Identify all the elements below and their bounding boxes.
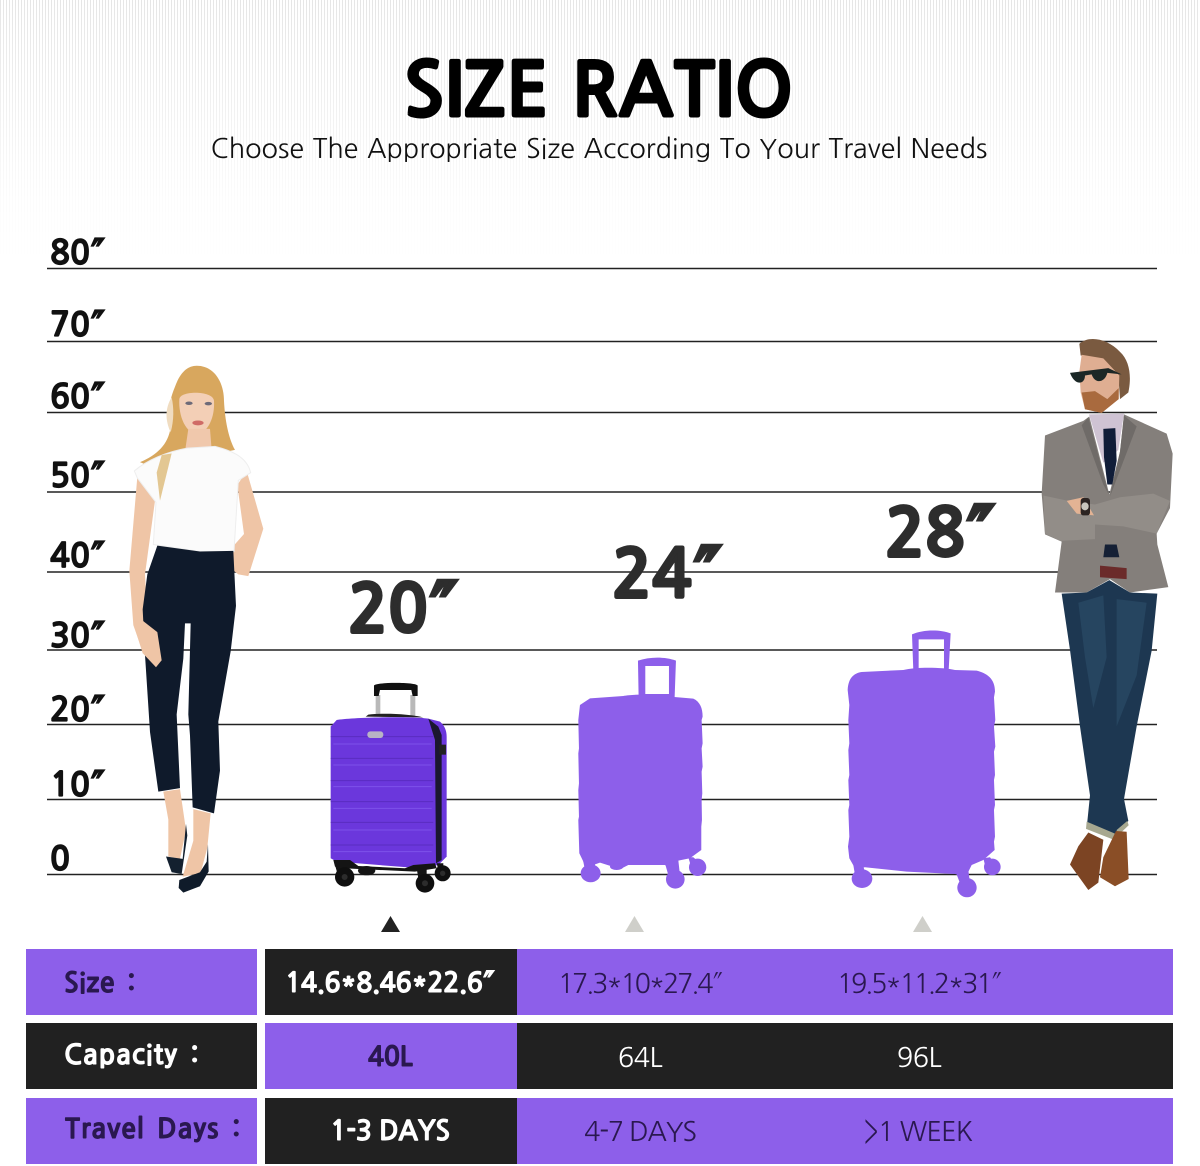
selector triangle 24 inch (625, 916, 644, 932)
height chart: 10″ (50, 768, 106, 801)
row: size: 19.5*11.2*31″ (837, 970, 1001, 997)
row: capacity (26, 1023, 1173, 1089)
row: size: 17.3*10*27.4″ (558, 970, 722, 997)
row: size: Size : (64, 970, 136, 997)
title: SIZE RATIO (404, 55, 794, 128)
row: size (26, 949, 1173, 1015)
man figure (1042, 339, 1173, 890)
size label 28 inch: 28″ (885, 500, 997, 566)
height chart: 80″ (50, 236, 106, 269)
purple 24 inch suitcase silhouette (578, 658, 706, 889)
height chart: 20″ (50, 693, 106, 726)
row: travel days: 1-3 DAYS (330, 1118, 450, 1145)
height chart: 30″ (50, 619, 106, 652)
height chart: 60″ (50, 380, 106, 413)
woman figure (129, 366, 263, 893)
row: capacity: 64L (618, 1044, 662, 1071)
height chart: 0 (50, 842, 70, 875)
selector triangle active (381, 916, 400, 932)
subtitle: Choose The Appropriate Size According To Your Travel Needs (211, 135, 987, 162)
height chart: 50″ (50, 459, 106, 492)
height chart: 70″ (50, 308, 106, 341)
row: capacity: 96L (897, 1044, 941, 1071)
size label 24 inch: 24″ (612, 541, 724, 607)
row: travel days (26, 1098, 1173, 1164)
selector triangle 28 inch (913, 916, 932, 932)
size label 20 inch: 20″ (348, 576, 460, 642)
row: travel days: >1 WEEK (864, 1118, 972, 1145)
row: capacity: 40L (368, 1044, 412, 1071)
row: size: 14.6*8.46*22.6″ (285, 970, 495, 997)
purple 28 inch suitcase silhouette (848, 630, 1001, 897)
row: travel days: Travel Days : (65, 1116, 241, 1143)
purple 20 inch suitcase (331, 683, 451, 893)
row: capacity: Capacity : (64, 1042, 200, 1069)
row: travel days: 4-7 DAYS (584, 1118, 696, 1145)
height chart: 40″ (50, 539, 106, 572)
